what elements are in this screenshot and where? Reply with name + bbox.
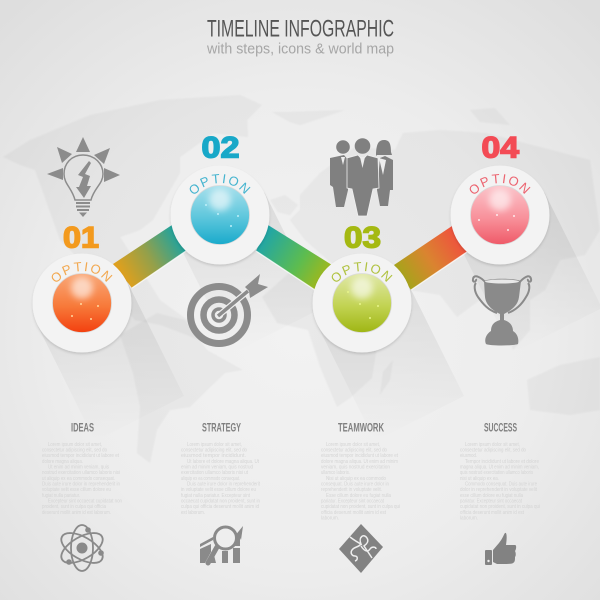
text block: strategy: eiusmod tempor incididunt. bbox=[181, 453, 246, 459]
node 03 bbox=[312, 222, 412, 355]
node 01: OPTION bbox=[52, 262, 112, 282]
text block: teamwork: dolore magna aliqua. Ut enim ad minim bbox=[321, 459, 398, 465]
text block: success: magna aliqua. Ut enim ad minim veniam, bbox=[460, 464, 539, 470]
text block: teamwork: reprehenderit in voluptate velit. bbox=[321, 487, 382, 493]
text block: strategy: aliquip ex ea commodo consequat. bbox=[181, 476, 240, 482]
label: strategy: STRATEGY bbox=[202, 422, 241, 434]
label: success: SUCCESS bbox=[484, 422, 517, 434]
text block: teamwork: Nisi ut aliquip ex ea commodo bbox=[326, 476, 386, 482]
node 01: 01 bbox=[63, 222, 99, 254]
text block: success: cupidatat non proident, sunt in culpa qui bbox=[460, 504, 540, 510]
subtitle: with steps, icons & world map bbox=[206, 40, 394, 58]
text block: success: quis nostrud exercitation ullamco laboris bbox=[460, 470, 533, 476]
text block: success bbox=[460, 442, 540, 522]
icon: light bulb bbox=[47, 137, 120, 217]
node 01 bbox=[32, 222, 132, 355]
text block: success: nisi ut aliquip ex ea. bbox=[460, 476, 499, 482]
text block: ideas: ut aliquip ex ea commodo consequat. bbox=[42, 476, 115, 482]
node 02: OPTION bbox=[190, 174, 250, 194]
text block: ideas: Lorem ipsum dolor sit amet, bbox=[48, 442, 102, 448]
text block: teamwork: consequat. Duis aute irure dolor in bbox=[321, 482, 389, 488]
text block: success: eiusmod. bbox=[460, 453, 477, 459]
icon: business team bbox=[330, 138, 393, 216]
text block: strategy: Lorem ipsum dolor sit amet, bbox=[187, 442, 242, 448]
text block: strategy: fugiat nulla pariatur. Excepteur sint bbox=[181, 493, 250, 499]
text block: success: Tempor incididunt ut labore et dolore bbox=[465, 459, 539, 465]
text block: strategy: Duis aute irure dolor in reprehenderit bbox=[187, 482, 260, 488]
text block: ideas: Excepteur sint occaecat cupidatat non bbox=[48, 498, 122, 504]
text block: strategy: Ut labore et dolore magna aliqua. Ut bbox=[187, 459, 259, 465]
long shadows bbox=[38, 192, 600, 441]
text block: teamwork: ullamco laboris. bbox=[321, 470, 350, 476]
node 03: 03 bbox=[344, 222, 381, 254]
world map bbox=[3, 95, 600, 463]
node 02 bbox=[170, 132, 270, 267]
text block: strategy: enim ad minim veniam, quis nostrud bbox=[181, 464, 253, 470]
text block: strategy: in voluptate velit esse cillum dolore eu bbox=[181, 487, 256, 493]
text block: ideas: Ut enim ad minim veniam, quis bbox=[48, 464, 109, 470]
ribbon: 02 to 03 bbox=[256, 225, 332, 290]
text block: teamwork: veniam, quis nostrud exercitation bbox=[321, 464, 390, 470]
text block: teamwork: Esse cillum dolore eu fugiat nulla bbox=[326, 493, 391, 499]
node 04 bbox=[450, 132, 550, 267]
text block: ideas: eiusmod tempor incididunt ut labore et bbox=[42, 453, 119, 459]
label: teamwork: TEAMWORK bbox=[338, 422, 384, 434]
text block: success: officia deserunt mollit anim id est bbox=[460, 510, 524, 516]
node 04: OPTION bbox=[470, 174, 530, 194]
text block: ideas bbox=[42, 442, 122, 516]
text block: ideas: proident, sunt in culpa qui officia bbox=[42, 504, 106, 510]
ribbon: 01 to 02 bbox=[113, 225, 186, 288]
text block: success: laborum. bbox=[460, 516, 478, 522]
icon: chart with magnifier bbox=[200, 526, 243, 563]
icon: atom bbox=[57, 525, 107, 571]
text block: ideas: fugiat nulla pariatur. bbox=[42, 493, 80, 499]
text block: teamwork: pariatur. Excepteur sint occaecat bbox=[321, 498, 384, 504]
text block: ideas: consectetur adipiscing elit, sed do bbox=[42, 448, 107, 454]
text block: success: Commodo consequat. Duis aute irure bbox=[465, 482, 537, 488]
node 02: 02 bbox=[202, 132, 240, 164]
node 04: 04 bbox=[482, 132, 519, 164]
icon: target with arrow bbox=[190, 274, 268, 344]
text block: teamwork: officia deserunt mollit anim id est bbox=[321, 510, 386, 516]
text block: success: pariatur. Excepteur sint occaecat bbox=[460, 498, 522, 504]
text block: success: dolor in reprehenderit in voluptate velit bbox=[460, 487, 537, 493]
text block: success: esse cillum dolore eu fugiat nulla bbox=[460, 493, 523, 499]
text block: teamwork: consectetur adipiscing elit, sed do bbox=[321, 448, 387, 454]
text block: teamwork: laborum. bbox=[321, 516, 339, 522]
text block: strategy: occaecat cupidatat non proident, sunt in bbox=[181, 498, 260, 504]
text block: ideas: nostrud exercitation ullamco laboris nisi bbox=[42, 470, 120, 476]
label: ideas: IDEAS bbox=[71, 422, 94, 434]
text block: strategy: consectetur adipiscing elit, sed do bbox=[181, 448, 247, 454]
text block: success: consectetur adipiscing elit, sed do bbox=[460, 448, 526, 454]
title: TIMELINE INFOGRAPHIC bbox=[207, 16, 394, 42]
text block: strategy: culpa qui officia deserunt mollit anim id bbox=[181, 504, 259, 510]
text block: strategy: est laborum. bbox=[181, 510, 205, 516]
icon: trophy bbox=[473, 276, 531, 346]
text block: success: Lorem ipsum dolor sit amet, bbox=[465, 442, 520, 448]
text block: strategy bbox=[181, 442, 260, 516]
text block: teamwork: Lorem ipsum dolor sit amet, bbox=[326, 442, 380, 448]
text block: teamwork: eiusmod tempor incididunt ut labore et bbox=[321, 453, 398, 459]
text block: ideas: Duis aute irure dolor in reprehenderit in bbox=[42, 482, 120, 488]
icon: thumbs up bbox=[485, 533, 516, 565]
ribbon: 03 to 04 bbox=[394, 226, 467, 290]
text block: teamwork bbox=[321, 442, 400, 522]
text block: ideas: deserunt mollit anim id est laborum. bbox=[42, 510, 111, 516]
text block: teamwork: cupidatat non proident, sunt in culpa qui bbox=[321, 504, 400, 510]
node 03: OPTION bbox=[332, 262, 392, 282]
icon: puzzle pieces bbox=[339, 524, 383, 573]
text block: strategy: exercitation ullamco laboris nisi ut bbox=[181, 470, 248, 476]
text block: ideas: voluptate velit esse cillum dolore eu bbox=[42, 487, 111, 493]
text block: ideas: dolore magna aliqua. bbox=[42, 459, 83, 465]
